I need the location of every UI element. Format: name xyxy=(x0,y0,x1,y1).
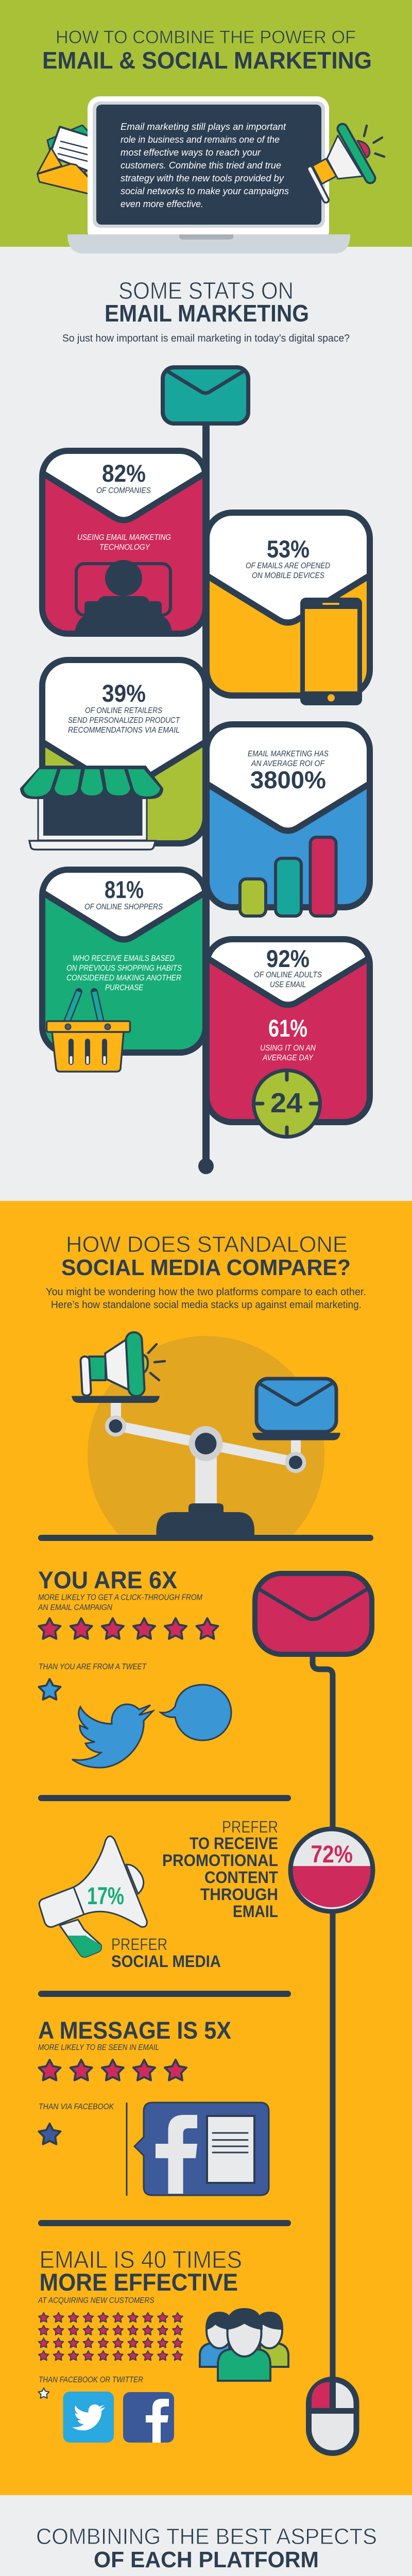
intro paragraph: customers. Combine this tried and true xyxy=(121,160,281,171)
icon: red envelope xyxy=(255,1573,372,1654)
card: 92% and 61%: OF ONLINE ADULTS xyxy=(254,971,322,979)
card: 3800%: AN AVERAGE ROI OF xyxy=(251,759,325,768)
panel: email marketing stats xyxy=(20,277,370,1174)
stat: 72% prefer email: PREFER xyxy=(222,1818,278,1836)
panel: social media comparison xyxy=(0,1201,412,2576)
stat: 40 times more effective xyxy=(38,2246,359,2453)
divider xyxy=(38,2220,291,2226)
heading xyxy=(62,277,350,344)
stat: 6x click-through: AN EMAIL CAMPAIGN xyxy=(38,1603,112,1612)
icon: teal envelope xyxy=(163,367,248,423)
card: 92% and 61%: 61% xyxy=(268,1014,307,1042)
card: 82%: USEING EMAIL MARKETING xyxy=(77,533,171,542)
forty red stars xyxy=(39,2313,183,2360)
one facebook blue star xyxy=(39,2124,60,2144)
icon: facebook square xyxy=(123,2392,174,2443)
card: 92% and 61%: USE EMAIL xyxy=(270,980,306,989)
card: 81% xyxy=(42,870,205,1072)
stat: 17% prefer social media: PREFER xyxy=(111,1935,167,1954)
intro paragraph: role in business and remains one of the xyxy=(121,134,280,145)
stat: 72% prefer email xyxy=(162,1818,373,1921)
stat: 6x click-through xyxy=(38,1566,231,1768)
laptop with intro text xyxy=(67,96,350,253)
stat: 72% prefer email: PROMOTIONAL xyxy=(162,1851,278,1870)
card: 82%: TECHNOLOGY xyxy=(99,543,150,552)
card: 82% xyxy=(42,451,205,635)
intro paragraph: social networks to make your campaigns xyxy=(121,185,289,196)
card: 3800%: 3800% xyxy=(250,766,326,793)
mouse cable xyxy=(313,1654,333,2380)
heading: You might be wondering how the two platforms compare to each other. xyxy=(46,1286,366,1298)
intro paragraph: Email marketing still plays an important xyxy=(121,121,286,132)
heading: OF EACH PLATFORM xyxy=(94,2547,319,2572)
stat: 17% prefer social media: 17% xyxy=(87,1882,124,1909)
six red stars xyxy=(39,1618,218,1639)
card: 39%: OF ONLINE RETAILERS xyxy=(85,706,162,715)
card: 81%: ON PREVIOUS SHOPPING HABITS xyxy=(66,964,182,973)
icon: phone xyxy=(300,598,362,705)
stat: 40 times more effective: EMAIL IS 40 TIMES xyxy=(39,2246,242,2273)
title: EMAIL & SOCIAL MARKETING xyxy=(42,47,372,74)
icon: 24 hour clock xyxy=(253,1071,320,1137)
card: 39% xyxy=(20,660,205,850)
card: 82%: OF COMPANIES xyxy=(96,486,151,495)
heading: SOCIAL MEDIA COMPARE? xyxy=(61,1255,351,1280)
intro paragraph xyxy=(121,121,289,209)
card: 3800% xyxy=(207,724,370,916)
icon: person at computer xyxy=(75,560,172,635)
stat: 72% prefer email: EMAIL xyxy=(233,1902,278,1921)
intro paragraph: most effective ways to reach your xyxy=(121,147,261,158)
one blue star xyxy=(39,1679,60,1700)
stat: 40 times more effective: THAN FACEBOOK OR TWITTER xyxy=(39,2376,143,2384)
icon: storefront xyxy=(20,766,163,850)
title: HOW TO COMBINE THE POWER OF xyxy=(56,27,356,47)
card: 53% xyxy=(207,513,370,705)
icon: facebook post xyxy=(126,2103,269,2196)
card: 92% and 61% xyxy=(207,939,370,1137)
panel: combining both platforms xyxy=(27,2524,382,2576)
icon: megaphone on scale xyxy=(80,1332,165,1397)
card: 39%: RECOMMENDATIONS VIA EMAIL xyxy=(68,726,180,735)
card: 92% and 61%: AVERAGE DAY xyxy=(262,1054,314,1062)
icon: 24 hour clock: 24 xyxy=(270,1088,302,1118)
icon: megaphone xyxy=(310,126,384,200)
card: 3800%: EMAIL MARKETING HAS xyxy=(248,750,329,758)
card: 53%: 53% xyxy=(267,535,310,563)
card: 53%: OF EMAILS ARE OPENED xyxy=(246,562,330,570)
card: 39%: SEND PERSONALIZED PRODUCT xyxy=(68,716,180,725)
heading xyxy=(46,1232,366,1311)
heading xyxy=(36,2524,377,2576)
balance scale illustration xyxy=(38,1331,373,1541)
stat: 17% prefer social media xyxy=(39,1836,221,1971)
card: 92% and 61%: 92% xyxy=(266,945,310,972)
stat: 6x click-through: THAN YOU ARE FROM A TWEET xyxy=(39,1663,147,1671)
stat: 72% prefer email: TO RECEIVE xyxy=(190,1834,278,1853)
card: 81%: OF ONLINE SHOPPERS xyxy=(84,903,163,911)
card: 82%: 82% xyxy=(102,460,146,487)
intro paragraph: even more effective. xyxy=(121,198,203,209)
stat: 6x click-through: MORE LIKELY TO GET A CLICK-THROUGH FROM xyxy=(38,1593,203,1602)
card: 81%: 81% xyxy=(105,876,144,903)
card: 53%: ON MOBILE DEVICES xyxy=(252,571,324,580)
heading: COMBINING THE BEST ASPECTS xyxy=(36,2524,377,2549)
icon: open envelope xyxy=(37,125,108,195)
divider xyxy=(38,1991,291,1997)
icon: group of customers xyxy=(200,2309,288,2381)
five red stars xyxy=(39,2060,186,2080)
stat: 5x seen in email: MORE LIKELY TO BE SEEN IN EMAIL xyxy=(38,2043,159,2052)
divider xyxy=(38,1795,291,1801)
card: 81%: CONSIDERED MAKING ANOTHER xyxy=(66,974,181,982)
stat: 72% prefer email: THROUGH xyxy=(200,1885,278,1904)
heading: HOW DOES STANDALONE xyxy=(66,1232,348,1257)
heading: EMAIL MARKETING xyxy=(105,300,309,327)
icon: computer mouse xyxy=(306,2377,359,2453)
heading: So just how important is email marketing in today’s digital space? xyxy=(62,333,350,344)
small white star xyxy=(38,2388,49,2398)
stat: 40 times more effective: MORE EFFECTIVE xyxy=(39,2268,238,2296)
stat: 6x click-through: YOU ARE 6X xyxy=(38,1566,177,1594)
stat: 5x seen in email xyxy=(38,2016,269,2196)
icon: shopping basket xyxy=(46,992,130,1072)
intro paragraph: strategy with the new tools provided by xyxy=(121,173,285,183)
icon: twitter square xyxy=(63,2392,114,2443)
stat: 72% prefer email: 72% xyxy=(311,1840,353,1868)
card: 92% and 61%: USING IT ON AN xyxy=(260,1044,316,1053)
stat: 17% prefer social media: SOCIAL MEDIA xyxy=(111,1952,221,1971)
card: 81%: PURCHASE xyxy=(105,984,143,992)
stat: 40 times more effective: AT ACQUIRING NEW CUSTOMERS xyxy=(38,2296,154,2305)
icon: white megaphone xyxy=(39,1836,147,1957)
bar chart icon xyxy=(240,837,336,916)
panel: intro header xyxy=(0,0,412,253)
title xyxy=(42,27,372,74)
card: 81%: WHO RECEIVE EMAILS BASED xyxy=(73,954,175,963)
timeline line xyxy=(198,422,214,1174)
stat: 5x seen in email: THAN VIA FACEBOOK xyxy=(39,2103,114,2111)
icon: twitter bird with speech bubble xyxy=(72,1685,231,1768)
stat: 72% prefer email: CONTENT xyxy=(204,1868,278,1887)
icon: blue envelope on scale xyxy=(256,1379,336,1432)
card: 39%: 39% xyxy=(102,680,146,707)
heading: SOME STATS ON xyxy=(118,277,294,304)
heading: Here’s how standalone social media stacks up against email marketing. xyxy=(51,1299,362,1311)
stat: 5x seen in email: A MESSAGE IS 5X xyxy=(38,2016,231,2044)
